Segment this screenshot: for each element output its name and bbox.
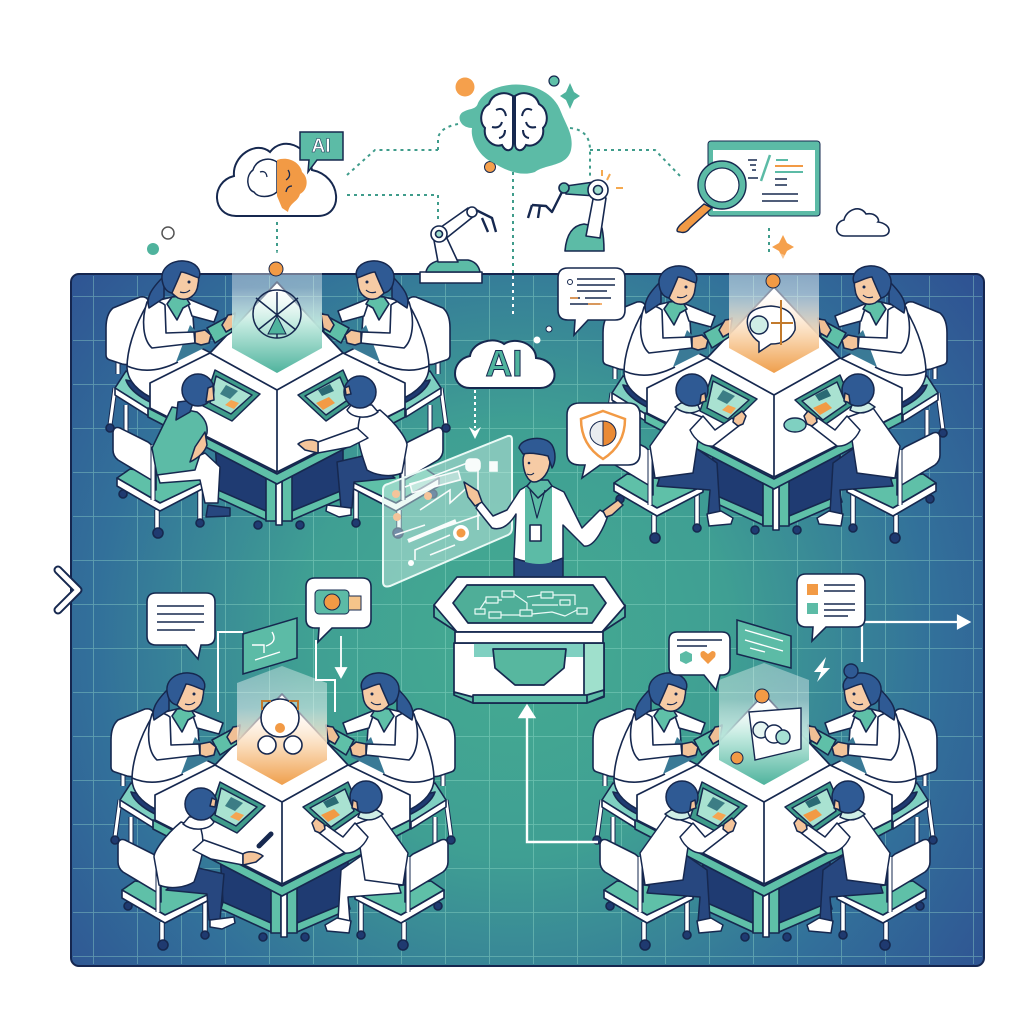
speech bubble: list bottom-right xyxy=(797,574,865,641)
icon: code screen with magnifier xyxy=(677,141,820,232)
icon: cloud with brain and AI badge xyxy=(217,132,343,216)
icon: small cloud xyxy=(837,209,889,236)
central holographic console xyxy=(434,577,625,703)
pod: bottom left table group xyxy=(111,666,455,950)
card: holographic diagram bottom-right xyxy=(737,620,791,668)
icon: central brain on teal cloud xyxy=(456,76,580,174)
speech bubble: brain shield xyxy=(567,403,640,478)
network connectors: dashed lines from central brain xyxy=(277,124,769,274)
pod: top left table group xyxy=(106,251,450,538)
speech bubble: camera icon xyxy=(306,578,371,642)
arrow: AI cloud to glass panel xyxy=(469,390,481,439)
speech bubble: heart and hexagon xyxy=(669,632,730,690)
icon: left chevron xyxy=(58,570,78,610)
small device on table xyxy=(784,418,806,432)
pod: bottom right table group xyxy=(593,663,937,950)
icon: cloud with brain and AI badge: AI xyxy=(312,136,330,157)
hologram: teal network xyxy=(232,251,322,373)
panel: classroom floor xyxy=(71,274,984,966)
speech bubble: text bottom-left xyxy=(147,593,215,659)
card: holographic diagram bottom-left xyxy=(243,618,297,674)
hologram: orange fan xyxy=(237,666,327,785)
icon: lightning bolt xyxy=(814,657,830,682)
decorative dots xyxy=(147,227,174,255)
hologram: teal cube xyxy=(719,663,809,785)
arrow: to the right xyxy=(862,616,969,662)
icon: robot arm left xyxy=(420,207,496,283)
icon: robot arm right xyxy=(528,170,623,251)
icon: orange sparkle xyxy=(772,235,794,259)
arrow: up into console xyxy=(520,706,598,842)
icon: central AI cloud xyxy=(455,326,555,388)
arrow: down beside camera bubble xyxy=(336,636,346,677)
icon: central AI cloud: AI xyxy=(486,343,522,384)
glass presentation panel xyxy=(383,436,512,586)
pod: top right table group xyxy=(603,251,947,543)
connector lines bottom-left group xyxy=(218,632,335,712)
icon: pen on table xyxy=(259,834,271,846)
teacher presenting xyxy=(464,438,623,579)
white dotted line into AI cloud xyxy=(512,276,514,316)
bun hairstyle xyxy=(844,664,858,678)
speech bubble: code text xyxy=(558,268,625,335)
hologram: orange chat lens xyxy=(729,251,819,373)
